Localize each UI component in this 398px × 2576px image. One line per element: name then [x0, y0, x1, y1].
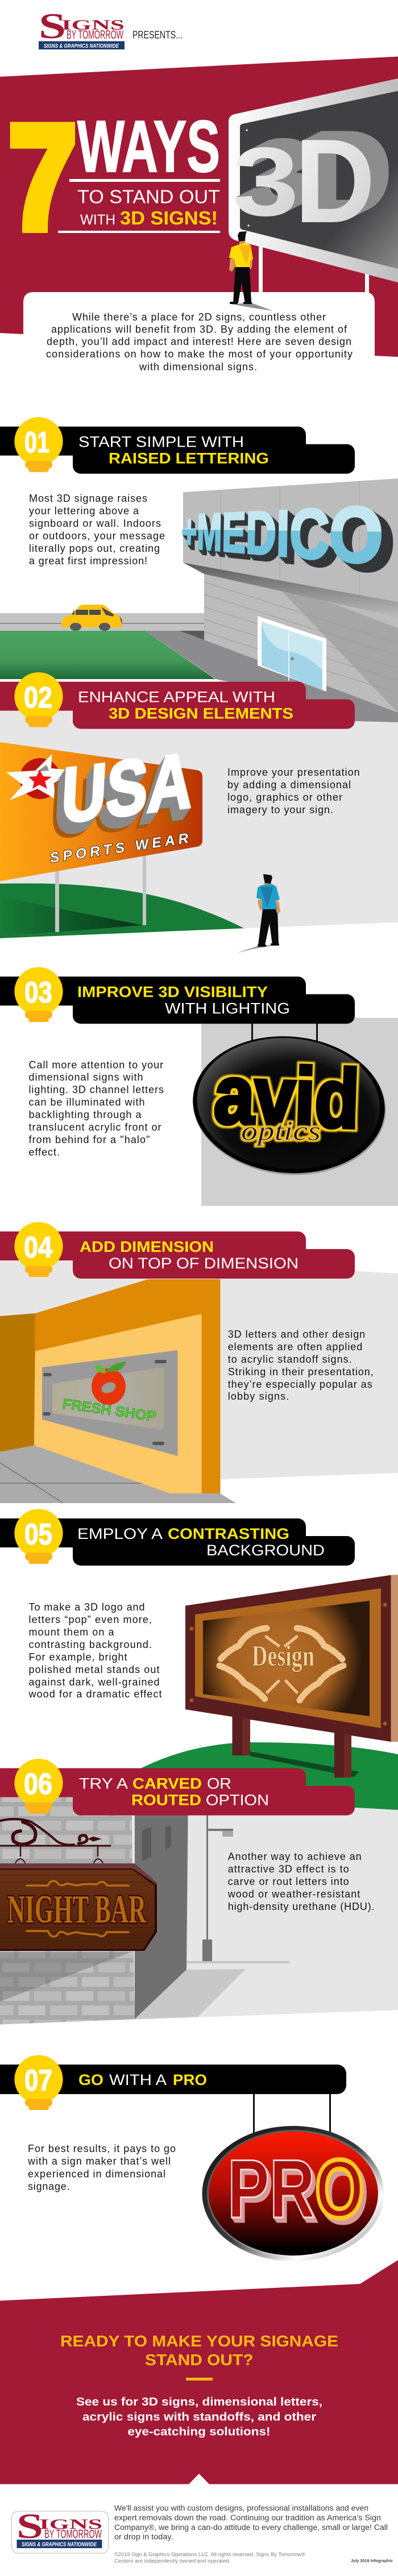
recessed wall	[34, 1314, 201, 1493]
illustration: carved wood design sign	[141, 1575, 398, 1810]
text: section 06: carve or rout letters into	[228, 1876, 349, 1887]
text: section 05: To make a 3D logo and	[28, 1601, 144, 1613]
intro text	[46, 311, 353, 373]
logo: Signs By Tomorrow top: SIGNS & GRAPHICS NATIONWIDE	[44, 43, 119, 49]
text: section 07: For best results, it pays to go	[28, 2143, 176, 2154]
Sports Wear lettering: SPORTS WEAR	[49, 830, 189, 866]
wall shadow	[0, 1952, 131, 2001]
text: section 04: they’re especially popular as	[228, 1379, 372, 1390]
heading: START SIMPLE WITH	[78, 434, 244, 451]
optics lettering: optics	[241, 1116, 321, 1146]
heading: 3D DESIGN ELEMENTS	[109, 705, 293, 722]
heading	[77, 983, 290, 1017]
brick wall	[0, 1790, 135, 2024]
hill	[0, 883, 244, 938]
heading: RAISED LETTERING	[109, 450, 269, 467]
text: section 04: Striking in their presentation,	[228, 1366, 374, 1378]
bulb badge: 06	[24, 1768, 52, 1801]
text: section 03: effect.	[28, 1146, 60, 1158]
bulb badge	[14, 417, 63, 472]
word WAYS: WAYS	[77, 106, 220, 188]
orange sign panel	[0, 742, 202, 881]
heading: ROUTED	[131, 1791, 201, 1808]
banner	[0, 1518, 355, 1566]
header 06	[0, 1759, 355, 1815]
person in yellow shirt	[229, 231, 273, 311]
illustration: USA billboard	[0, 736, 244, 938]
illustration: fresh shop storefront	[0, 1279, 236, 1503]
title: 7 Ways to stand out with 3D signs	[9, 95, 220, 259]
billboard posts	[259, 244, 369, 301]
subtitle line 2: WITH	[80, 212, 115, 228]
heading: CARVED	[132, 1775, 202, 1792]
cta heading: READY TO MAKE YOUR SIGNAGE	[60, 2332, 338, 2350]
footer text: expert removals down the road. Continuing our tradition as America’s Sign	[114, 2513, 381, 2522]
side column	[0, 1313, 35, 1452]
letters 3D: D	[295, 114, 375, 248]
posts	[55, 855, 146, 932]
text: section 05: contrasting background.	[28, 1639, 152, 1650]
heading: EMPLOY A	[77, 1525, 163, 1542]
heading: GO	[78, 2071, 103, 2088]
text: section 03: dimensional signs with	[28, 1072, 143, 1083]
banner	[0, 976, 355, 1024]
text: section 03	[28, 1059, 164, 1158]
text: section 01: a great first impression!	[29, 555, 147, 567]
billboard frame	[229, 78, 398, 282]
heading: ADD DIMENSION	[80, 1238, 214, 1255]
text: section 03: lighting. 3D channel letters	[28, 1084, 164, 1096]
heading: BACKGROUND	[206, 1542, 325, 1559]
soffit	[183, 563, 398, 617]
text: section 05: polished metal stands out	[28, 1664, 159, 1675]
red background	[0, 2260, 398, 2484]
text: section 02: logo, graphics or other	[227, 792, 342, 803]
gray panel	[201, 1018, 398, 1206]
subtitle line 2	[80, 207, 218, 228]
cta text	[76, 2396, 322, 2438]
logo: Signs By Tomorrow footer	[11, 2507, 108, 2553]
illustration: avid optics lit sign	[187, 1018, 398, 1206]
heading: ENHANCE APPEAL WITH	[78, 689, 275, 706]
header 05	[0, 1509, 355, 1566]
text: section 05	[28, 1601, 161, 1700]
text: section 07: signage.	[28, 2181, 70, 2192]
text: section 04: lobby signs.	[228, 1391, 289, 1402]
text: section 03: backlighting through a	[28, 1109, 142, 1121]
text: section 05: letters “pop” even more,	[28, 1614, 152, 1625]
intro text: While there’s a place for 2D signs, countless other	[72, 311, 326, 323]
outer frame	[185, 1575, 391, 1742]
banner	[0, 682, 355, 729]
text: section 04: to acrylic standoff signs.	[228, 1354, 352, 1365]
text: section 05: wood for a dramatic effect	[28, 1688, 161, 1700]
medico sign lettering: +MEDICO	[233, 352, 276, 715]
text: section 06: high-density urethane (HDU).	[228, 1901, 375, 1912]
logo: Signs By Tomorrow footer: BY TOMORROW	[44, 2528, 102, 2541]
bulb badge	[14, 2055, 63, 2110]
inner frame	[195, 1588, 381, 1728]
scroll ornaments	[27, 1881, 128, 1937]
illustration: pro sign	[202, 2091, 384, 2261]
fascia	[183, 478, 398, 602]
billboard board	[240, 91, 398, 269]
fresh shop lettering: FRESH SHOP	[61, 1396, 157, 1425]
text: section 01: Most 3D signage raises	[29, 493, 147, 504]
wood panel	[203, 1601, 370, 1716]
street lamp	[186, 1796, 289, 1963]
bulb badge	[14, 1509, 63, 1564]
intro text: considerations on how to make the most of your opportunity	[46, 348, 353, 360]
text: section 01: signboard or wall. Indoors	[29, 518, 161, 529]
car	[61, 605, 122, 631]
text: section 06	[227, 1851, 375, 1912]
bulb badge: 07	[24, 2064, 52, 2097]
heading	[80, 1238, 298, 1272]
road	[0, 613, 205, 631]
text: section 05: against dark, well-grained	[28, 1676, 159, 1688]
logo: Signs By Tomorrow top: IGNS	[61, 18, 125, 33]
hill shadow	[0, 897, 142, 935]
text: section 03: can be illuminated with	[28, 1097, 144, 1108]
storefront face	[34, 1279, 221, 1493]
footer text	[114, 2504, 388, 2541]
letters 3D	[232, 114, 375, 248]
ornaments	[219, 1628, 343, 1700]
hangers	[251, 1020, 318, 1043]
floor	[0, 1446, 236, 1503]
section 06 background	[0, 1790, 398, 2024]
heading: OPTION	[206, 1791, 269, 1808]
logo: Signs By Tomorrow footer: SIGNS & GRAPHICS NATIONWIDE	[22, 2541, 97, 2548]
illustration: night bar sign	[0, 1790, 289, 2024]
bulb badge	[14, 1759, 63, 1814]
avid lettering: avid	[213, 1048, 361, 1146]
text: section 02: imagery to your sign.	[227, 804, 333, 815]
copyright text	[114, 2552, 305, 2564]
cta text: See us for 3D signs, dimensional letters,	[76, 2396, 322, 2408]
person in blue shirt	[237, 874, 280, 953]
header 04	[0, 1222, 355, 1279]
logo: Signs By Tomorrow top: S	[39, 6, 66, 46]
hangers	[253, 2091, 331, 2134]
heading	[78, 689, 293, 722]
heading: PRO	[173, 2071, 207, 2088]
heading	[78, 434, 269, 467]
logo: Signs By Tomorrow top: BY TOMORROW	[67, 28, 123, 41]
bulb badge: 04	[24, 1231, 52, 1264]
bulb badge: 02	[24, 681, 52, 714]
star	[6, 754, 76, 800]
banner	[0, 1768, 355, 1815]
logo: Signs By Tomorrow top	[39, 6, 125, 49]
grass hill	[141, 1742, 398, 1810]
sidewalk	[145, 631, 398, 722]
logo: Signs By Tomorrow footer: IGNS	[39, 2517, 102, 2532]
apple logo	[92, 1362, 126, 1405]
hero background panel	[0, 57, 398, 357]
heading: IMPROVE 3D VISIBILITY	[77, 983, 268, 1000]
section 02 background	[0, 679, 398, 938]
text: section 05: For example, bright	[28, 1651, 127, 1663]
red disc	[19, 758, 60, 799]
heading: CONTRASTING	[168, 1525, 289, 1542]
heading: TRY A	[79, 1775, 128, 1792]
cta text: eye-catching solutions!	[127, 2426, 271, 2438]
night bar lettering: NIGHT BAR	[7, 1888, 147, 1932]
intro text: with dimensional signs.	[139, 361, 257, 373]
header 03	[0, 967, 355, 1024]
bulb badge	[14, 672, 63, 727]
heading	[79, 1775, 269, 1808]
text: section 01: your lettering above a	[29, 505, 139, 517]
logo: Signs By Tomorrow footer: S	[16, 2507, 43, 2546]
copyright text: Centers are independently owned and operated.	[114, 2558, 231, 2564]
cta heading	[60, 2332, 338, 2369]
glass door	[258, 616, 326, 692]
banner	[0, 427, 355, 474]
text: section 02: by adding a dimensional	[227, 779, 351, 790]
PRO lettering: PRO	[227, 2143, 364, 2236]
text: section 03: translucent acrylic front or	[28, 1122, 161, 1133]
heading: WITH LIGHTING	[165, 1000, 290, 1017]
wall	[204, 568, 398, 713]
side wall	[135, 1790, 188, 2019]
text: section 06: Another way to achieve an	[228, 1851, 362, 1862]
intro white panel	[23, 292, 375, 398]
text: section 01	[29, 493, 165, 567]
round sign	[202, 2126, 384, 2261]
acrylic panel	[42, 1350, 177, 1456]
text: section 07: with a sign maker that’s well	[27, 2155, 171, 2167]
heading: ON TOP OF DIMENSION	[109, 1255, 298, 1272]
bulb badge: 01	[24, 426, 49, 459]
bulb badge	[14, 967, 63, 1022]
letters 3D: 3	[232, 127, 299, 236]
bulb badge	[14, 1222, 63, 1277]
banner	[0, 2065, 346, 2094]
billboard with 3D letters	[229, 78, 398, 301]
post shadow	[250, 1751, 359, 1777]
header 07	[0, 2055, 346, 2110]
heading	[77, 1525, 325, 1559]
text: presents: PRESENTS...	[132, 30, 183, 41]
footer text: Company®, we bring a can-do attitude to every challenge, small or large! Call	[114, 2523, 388, 2532]
round sign	[187, 1029, 392, 1183]
text: section 04: 3D letters and other design	[228, 1329, 365, 1340]
text: section 06: wood or weather-resistant	[227, 1888, 360, 1900]
date note: July 2019 Infographic	[351, 2560, 393, 2563]
USA lettering: USA	[59, 736, 195, 840]
footer text: We'll assist you with custom designs, professional installations and even	[114, 2504, 368, 2512]
lawn	[0, 631, 215, 679]
text: section 04: elements are often applied	[228, 1341, 362, 1352]
section 04 background	[0, 1250, 398, 1479]
subtitle line 1: TO STAND OUT	[77, 186, 220, 207]
text: section 02: Improve your presentation	[227, 767, 360, 778]
bulb badge: 05	[24, 1518, 52, 1551]
text: section 07	[27, 2143, 176, 2192]
banner	[0, 1231, 355, 1279]
standoff bolts	[43, 1360, 167, 1445]
posts	[232, 1713, 351, 1778]
text: section 06: attractive 3D effect is to	[228, 1863, 349, 1875]
text: section 07: experienced in dimensional	[28, 2169, 165, 2180]
intro text: depth, you’ll add impact and interest! Here are seven design	[47, 336, 351, 347]
heading	[78, 2071, 207, 2088]
intro text: applications will benefit from 3D. By adding the element of	[51, 324, 347, 335]
illustration: medico building	[0, 478, 398, 722]
text: section 03: from behind for a "halo"	[28, 1134, 150, 1145]
closing call-to-action panel	[0, 2260, 398, 2484]
wooden board	[0, 1863, 157, 1951]
Design lettering: Design	[252, 1640, 314, 1672]
cta heading: STAND OUT?	[145, 2351, 254, 2369]
heading: OR	[207, 1775, 231, 1792]
text: section 05: mount them on a	[28, 1626, 114, 1638]
header 01	[0, 417, 355, 474]
text: section 01: or outdoors, your message	[29, 530, 165, 542]
bulb badge: 03	[24, 976, 52, 1009]
ground shadow	[135, 1969, 246, 2019]
subtitle line 2: 3D SIGNS!	[120, 207, 218, 228]
heading: WITH A	[109, 2071, 167, 2088]
header 02	[0, 672, 355, 729]
cta text: acrylic signs with standoffs, and other	[82, 2411, 316, 2423]
copyright text: ©2019 Sign & Graphics Operations LLC. All rights reserved. Signs By Tomorrow®	[114, 2552, 305, 2557]
footer text: or drop in today.	[114, 2533, 173, 2541]
text: section 02	[227, 767, 360, 815]
text: section 03: Call more attention to your	[28, 1059, 163, 1071]
numeral 7: 7	[9, 95, 76, 259]
text: section 04	[228, 1329, 374, 1402]
iron bracket	[0, 1819, 110, 1863]
text: section 01: literally pops out, creating	[29, 543, 160, 554]
